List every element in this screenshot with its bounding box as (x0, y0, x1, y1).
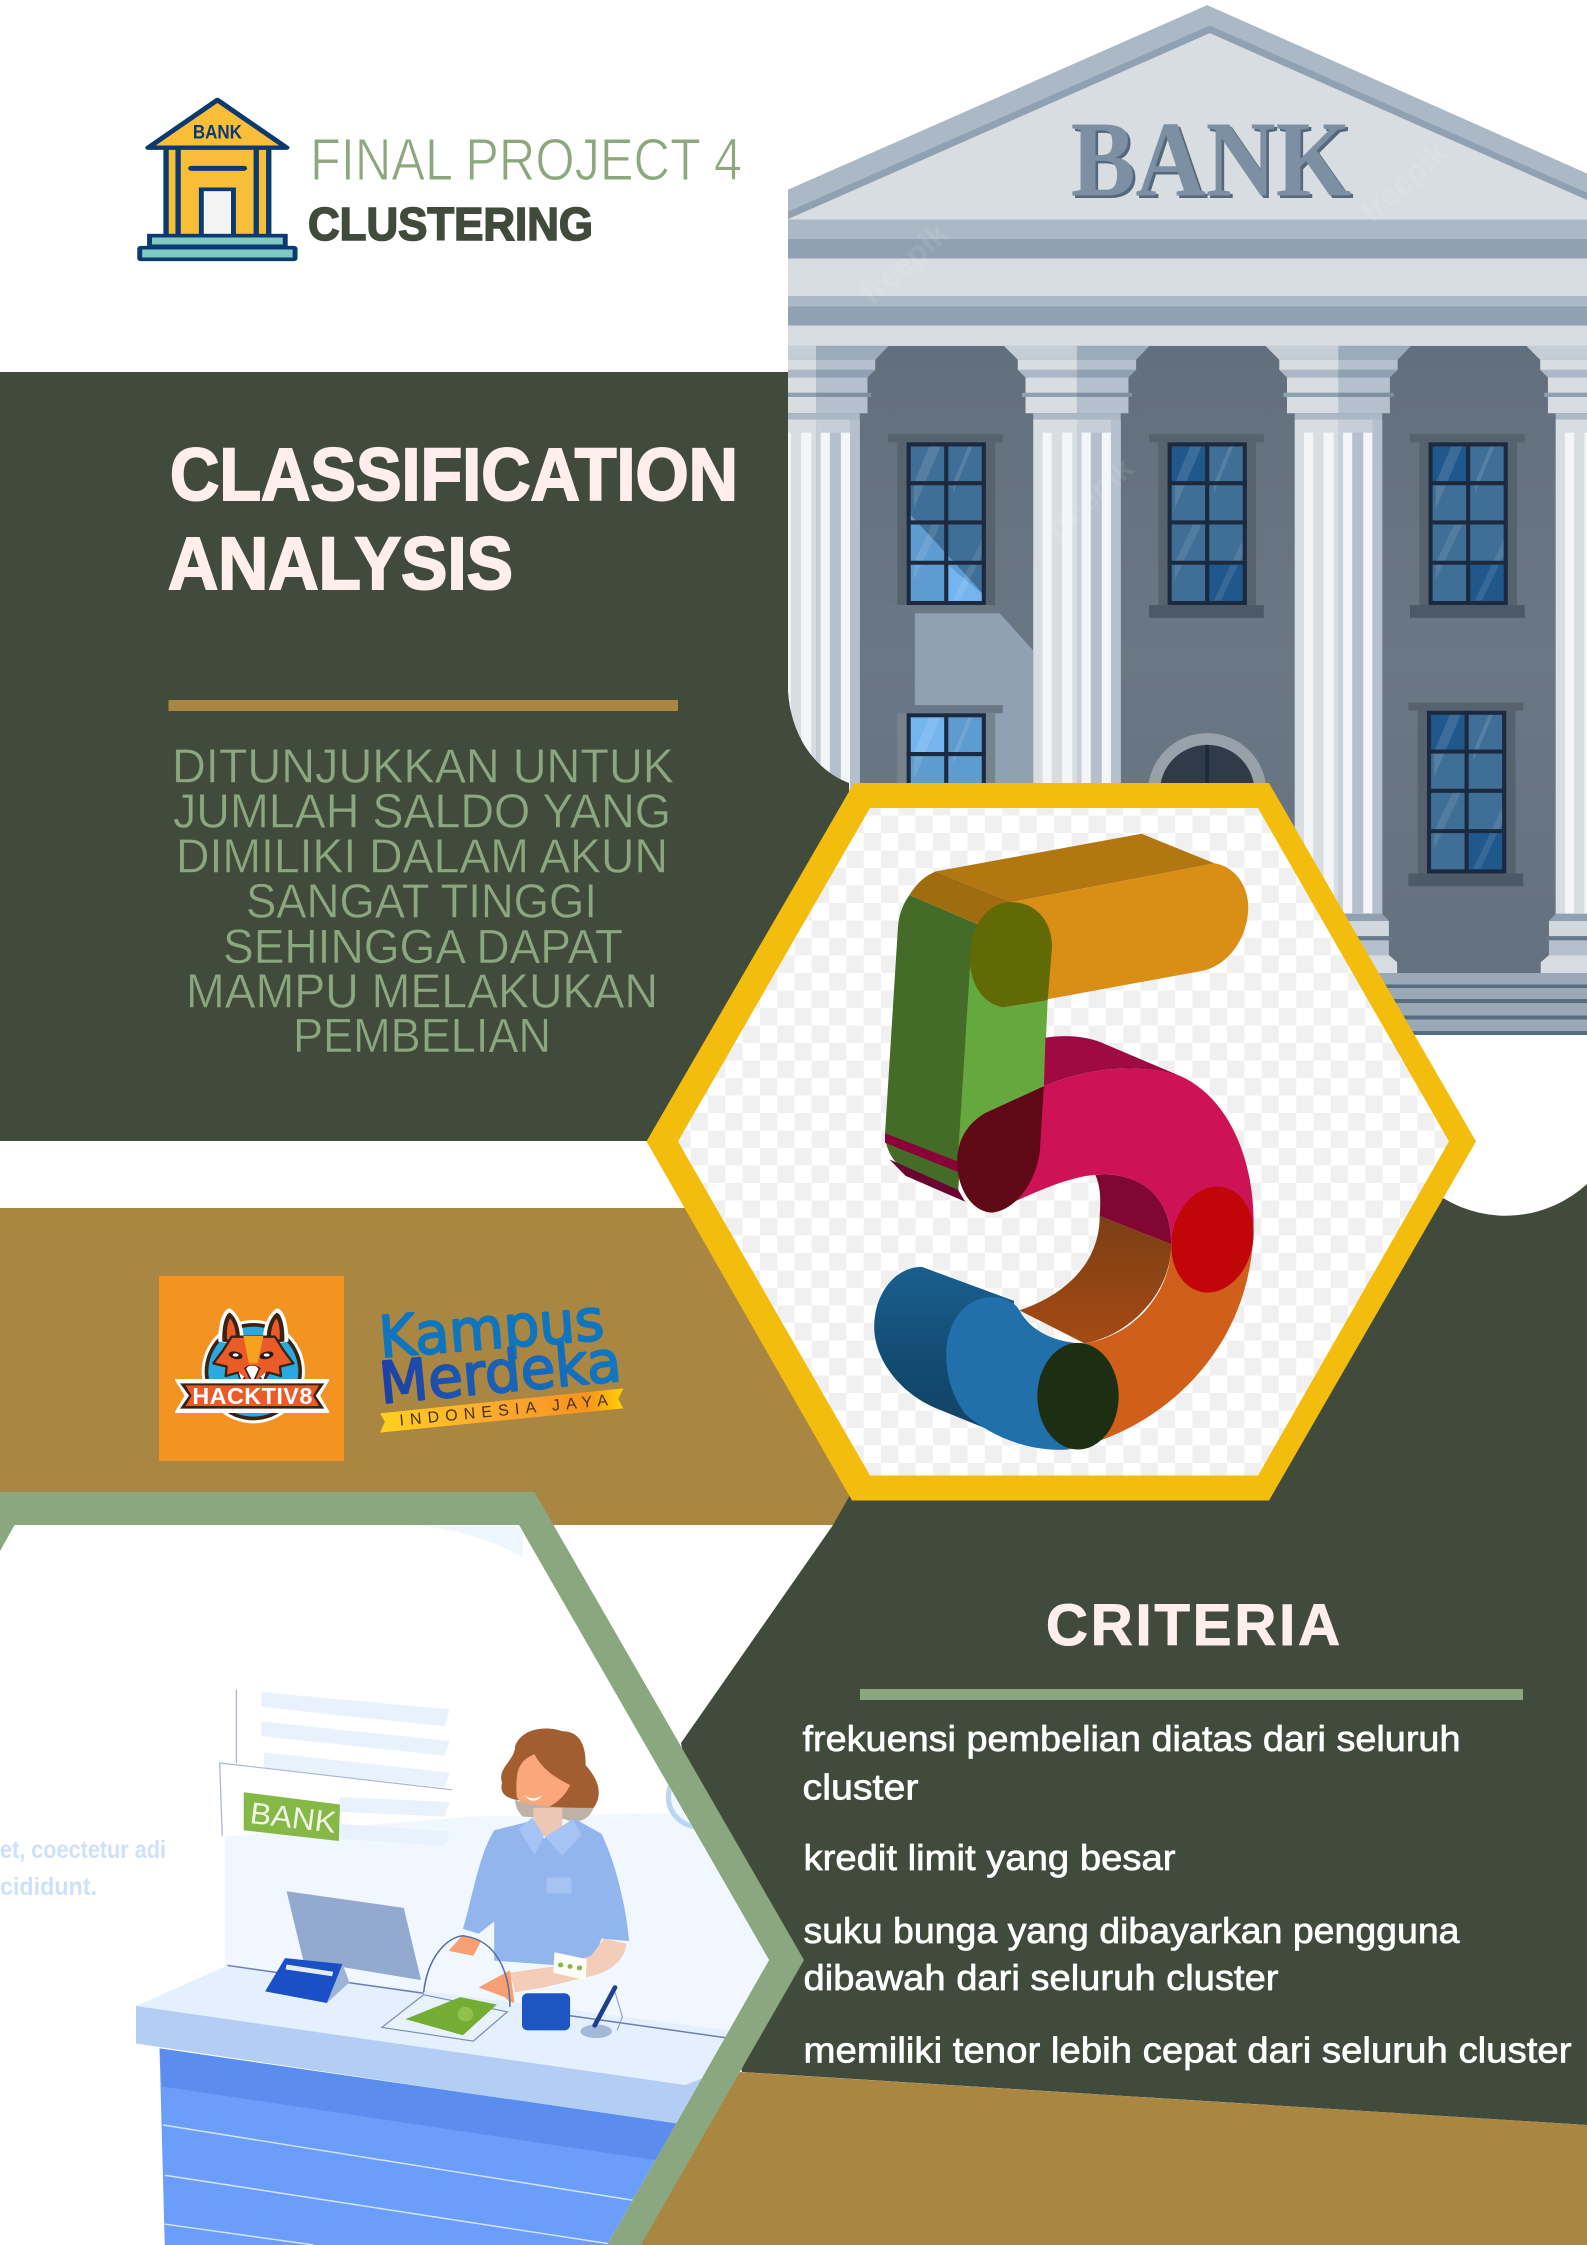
green front (958, 956, 1048, 1152)
arched door (1148, 733, 1266, 783)
heading: criteria: CRITERIA (1046, 1593, 1340, 1658)
columns (743, 346, 1587, 973)
blurred lorem text: et, coectetur adi (0, 1836, 166, 1864)
lower blue back (874, 1267, 1014, 1438)
hexagon: number five badge (646, 783, 1476, 1500)
window: upper right (1410, 434, 1525, 618)
paper lines (262, 1692, 450, 1828)
hexagon frame (646, 783, 1476, 1500)
text block: criteria list: suku bunga yang dibayarkan pengguna (804, 1910, 1461, 1951)
laptop (287, 1891, 421, 1980)
dark end ellipse (1037, 1343, 1119, 1450)
red ellipse (1164, 1182, 1261, 1297)
magenta front (1014, 1069, 1254, 1244)
orange bar top (935, 834, 1215, 902)
text block: description: SANGAT TINGGI (246, 876, 597, 928)
panel: tan bottom wedge (600, 2072, 1587, 2245)
pediment roof (788, 5, 1587, 218)
text block: description: DIMILIKI DALAM AKUN (176, 830, 668, 884)
olive cap (970, 902, 1052, 1007)
header logo: bank icon (140, 100, 295, 259)
corner brown (909, 871, 1011, 925)
blue box (522, 1993, 570, 2030)
number 5 graphic (874, 834, 1261, 1450)
watermark: freepik (1038, 450, 1141, 546)
green stripes (885, 1133, 965, 1202)
pen holder (581, 1987, 622, 2038)
window: lower right (1408, 703, 1523, 886)
text block: criteria list: dibawah dari seluruh cluster (804, 1957, 1279, 1998)
inner brown (1019, 1216, 1171, 1343)
heading: classification analysis: ANALYSIS (168, 522, 513, 605)
bank sign: BANK (248, 1796, 338, 1840)
banner text: HACKTIV8 (192, 1383, 312, 1409)
illustration: bank building (743, 5, 1587, 1035)
watermark (907, 239, 1135, 481)
bank sign text: BANK (1071, 100, 1351, 219)
lower orange (1068, 1223, 1254, 1450)
logo: hacktiv8 (159, 1276, 344, 1461)
card reader (265, 1958, 349, 2003)
header subtitle: clustering: CLUSTERING (308, 198, 593, 250)
ribbon text: INDONESIA JAYA (399, 1392, 609, 1430)
heading: classification analysis (168, 433, 738, 605)
window: lower left (898, 705, 1003, 783)
frame: left hexagon border (0, 1492, 804, 2245)
orange bar front (1003, 863, 1248, 1007)
front steps (1378, 973, 1587, 1035)
text block: description: PEMBELIAN (293, 1010, 551, 1063)
panel: tan logo band (0, 1208, 900, 1525)
circle accent (666, 1785, 694, 1830)
text block: criteria list: frekuensi pembelian diatas dari seluruh (802, 1718, 1460, 1759)
text block: description: SEHINGGA DAPAT (223, 921, 623, 974)
teller (449, 1729, 629, 2007)
text block: description: MAMPU MELAKUKAN (186, 966, 658, 1018)
checkered interior (678, 808, 1449, 1476)
panel: dark green classification background (0, 372, 900, 1141)
header title: final project: FINAL PROJECT 4 (310, 127, 742, 193)
photo: bank teller illustration (0, 1500, 800, 2245)
icon body (166, 148, 269, 236)
logo: kampus merdeka (376, 1286, 624, 1433)
watermark: freepik (1352, 133, 1455, 230)
blurred lorem text (0, 1840, 164, 1895)
text block: criteria list: cluster (802, 1766, 919, 1808)
blurred lorem text: cididunt. (0, 1873, 97, 1901)
ribbon (380, 1388, 623, 1433)
back wall (225, 1812, 774, 2056)
kampus word: Kampus (376, 1286, 606, 1371)
text block: description (172, 740, 674, 1063)
magenta top (1044, 1036, 1182, 1086)
bank sign text shadow: BANK (1073, 102, 1354, 222)
green back (885, 895, 979, 1192)
counter top (136, 1965, 774, 2085)
divider: brown rule (168, 700, 678, 711)
fox badge (202, 1308, 305, 1423)
text block: criteria list: kredit limit yang besar (804, 1837, 1176, 1878)
cash tray (382, 1936, 510, 2041)
icon label: BANK (193, 121, 242, 143)
wall (788, 346, 1587, 973)
inner maroon (1095, 1174, 1171, 1244)
text block: description: JUMLAH SALDO YANG (173, 786, 671, 838)
lower blue front (946, 1297, 1085, 1450)
panel: dark green criteria background (681, 1184, 1587, 2125)
counter front (160, 2048, 680, 2245)
merdeka word: Merdeka (376, 1328, 624, 1417)
text block: criteria list: memiliki tenor lebih cepat dari seluruh cluster (804, 2030, 1572, 2070)
logo background (159, 1276, 344, 1461)
watermark: freepik (853, 215, 955, 311)
divider: green rule (860, 1689, 1523, 1700)
text block: description: DITUNJUKKAN UNTUK (172, 740, 674, 794)
window: upper left (888, 434, 1003, 613)
maroon cap (957, 1086, 1044, 1213)
banner (176, 1380, 328, 1412)
text block: criteria list (802, 1718, 1572, 2070)
window: upper centre (1149, 434, 1264, 618)
heading: classification analysis: CLASSIFICATION (170, 433, 738, 516)
